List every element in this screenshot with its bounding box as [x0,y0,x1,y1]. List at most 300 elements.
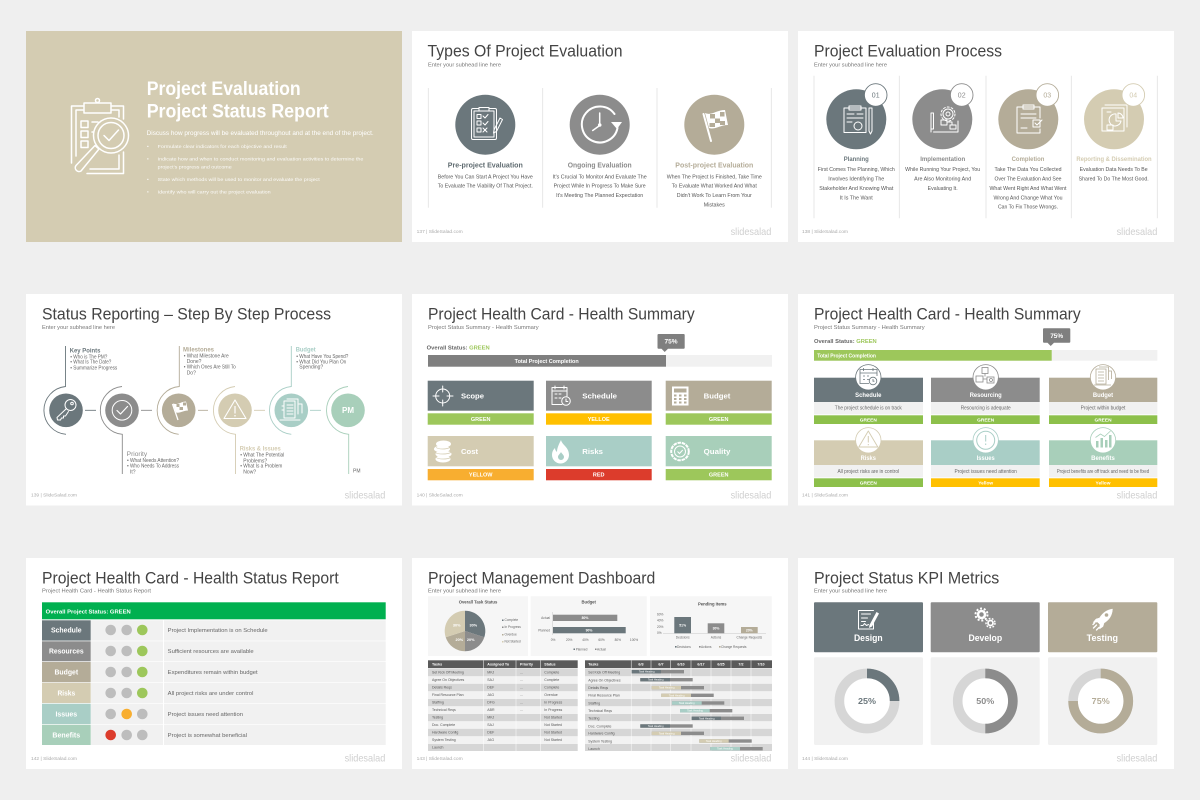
chart: budget bars: Planned [576,647,588,651]
chart: gantt timeline: 6/25 [717,662,725,666]
card: risks [546,436,652,480]
chart: gantt timeline: Staffing [588,702,600,706]
row: benefits: Benefits [52,732,80,740]
chart: gantt timeline: Doc. Complete [588,724,612,728]
card: issues: Issues [977,455,995,462]
chart: overall task status pie: In Progress [504,625,521,629]
table: task assignments: DEF [487,686,494,690]
subhead: Project Status Summary - Health Summary [814,325,925,331]
card: benefits [1049,428,1157,487]
card: scope [428,381,534,425]
chart: gantt timeline: Agree On Objectives [588,678,621,682]
table: task assignments: Doc. Complete [432,723,455,727]
chart: pending items columns: 40% [657,619,664,623]
step: reporting and dissemination: Shared To Do The Most Good. [1079,177,1149,183]
overall status banner: Overall Project Status: GREEN [46,609,131,615]
step: completion: Completion [1012,156,1044,163]
callout: 75 percent: 75% [664,338,678,346]
step: implementation: Are Also Monitoring And [914,177,971,183]
step: key points: Key Points [70,347,101,354]
logo wordmark: slidesalad [731,489,771,501]
card: budget: GREEN [709,417,729,423]
chart: overall task status pie: 20% [455,638,464,642]
row: budget [42,662,386,682]
chart: gantt timeline: 6/3 [638,662,644,666]
row: issues [42,704,386,724]
chart: pending items columns: Change Requests [737,635,762,639]
logo wordmark: slidesalad [345,753,385,765]
chart: pending items columns: 20% [746,628,753,632]
chart: budget bars: Actual [597,647,606,651]
completion progress bar [814,350,1157,361]
card: budget: GREEN [1094,417,1112,423]
subhead: Project Health Card - Health Status Report [42,589,151,595]
card: develop [931,602,1040,745]
card: schedule: The project schedule is on track [835,406,902,412]
item: post-project evaluation: Didn't Work To Learn From Your [677,193,752,199]
chart: pending items columns: Actions [711,635,722,639]
row: resources: Resources [49,648,84,656]
chart: gantt timeline: Task Heading [669,693,685,697]
step: milestones: Milestones [183,346,215,353]
subhead: Enter your subhead line here [428,62,501,68]
card: design: Design [854,633,883,644]
table: task assignments: Overdue [544,693,558,697]
panel: health summary with icon cards [412,294,788,506]
step: planning: Planning [844,156,869,163]
step: budget [274,346,348,427]
table: task assignments: Status [544,662,556,666]
intro and bullet list: • [147,178,149,183]
heading: Project Management Dashboard [428,569,655,587]
logo wordmark: slidesalad [731,753,771,765]
card: testing [1048,602,1157,745]
chart: pending items columns: 0% [657,631,662,635]
table: task assignments: ... [520,678,523,682]
chart: gantt timeline: Details Reqs [588,686,608,690]
step: key points: Who is The PM? [73,354,107,360]
table: task assignments: DEF [487,730,494,734]
row: resources [42,641,386,661]
step: key points: Summarize Progress [73,365,118,371]
item: post-project evaluation: To Evaluate What Worked And What [672,184,757,190]
card: testing: 75% [1092,696,1110,706]
step: budget: What Did You Plan On [299,359,346,365]
footer: 138 | SlideSalad.com [802,229,848,234]
card: benefits: Yellow [1096,480,1111,486]
panel: project management dashboard [412,558,788,769]
callout: 75 percent: 75% [1050,333,1063,340]
step: risks and issues: • [240,464,242,470]
chart: budget bars: 20% [566,638,573,642]
table: task assignments: JAG [487,693,494,697]
card: develop: Develop [968,633,1002,644]
card: cost: Cost [461,447,479,456]
chart: pending items columns: Actions [701,645,712,649]
footer: 141 | SlideSalad.com [802,492,848,497]
panel: project evaluation process [798,31,1174,242]
table: task assignments: Hardware Config [432,730,458,734]
item: ongoing evaluation: Project While In Progress To Make Sure [554,184,646,190]
panel: status reporting step by step [26,294,402,506]
subhead: Project Status Summary - Health Summary [428,325,539,331]
completion progress bar: Total Project Completion [515,359,579,365]
card: risks: All project risks are in control [837,469,899,475]
step: completion: Over The Evaluation And See [994,177,1062,183]
row: benefits: Project is somewhat beneficial [168,733,247,739]
step: priority [105,394,179,475]
step: priority: Priority [127,451,148,458]
chart: gantt timeline: Launch [588,747,600,751]
table: task assignments: SAJ [487,678,494,682]
chart: overall task status pie: Complete [504,618,518,622]
row: resources: Sufficient resources are available [168,649,254,655]
chart: budget bars: 90% [586,628,592,632]
row: benefits [42,725,386,745]
step: key points: • [70,354,72,360]
step: planning: It Is The Want [840,195,873,201]
chart: pending items columns: 51% [679,624,686,628]
logo wordmark: slidesalad [1117,226,1157,238]
logo wordmark: slidesalad [1117,489,1157,501]
row: risks: Risks [57,690,75,698]
chart: budget bars: Budget [581,599,597,604]
chart: budget bars: Planned [538,628,550,632]
chart: budget bars: Actual [541,616,550,620]
chart: overall task status pie: 20% [467,638,475,642]
table: task assignments: MKJ [487,716,495,720]
chart: pending items columns: Change Requests [721,645,747,649]
heading: Status Reporting – Step By Step Process [42,305,331,323]
chart: gantt timeline: Testing [588,717,599,721]
card: issues [931,428,1040,487]
chart: gantt timeline: 7/2 [738,662,744,666]
step: milestones: What Milestone Are [187,354,229,360]
card: resourcing [931,365,1040,424]
intro and bullet list: project's progress and outcome [158,164,232,170]
card: budget [1049,365,1157,424]
heading: Project Health Card - Health Status Report [42,569,339,587]
table: task assignments: Complete [544,686,559,690]
chart: gantt timeline: Task Heading [648,678,664,682]
card: risks: Risks [582,447,603,456]
chart: budget bars [531,596,647,656]
table: task assignments: Complete [544,678,559,682]
item: post-project evaluation [667,95,762,208]
step: planning: First Comes The Planning, Which [818,167,895,173]
intro and bullet list: • [147,157,149,162]
card: schedule [814,365,923,424]
step: key points: • [70,360,72,366]
item: ongoing evaluation: It's Meeting The Planned Expectation [556,193,643,199]
card: schedule: Schedule [855,392,882,399]
chart: gantt timeline: 6/10 [677,662,685,666]
intro and bullet list: • [147,191,149,196]
row: schedule: Schedule [51,628,82,635]
card: risks: GREEN [860,480,877,486]
table: task assignments: ... [520,670,523,674]
step: reporting and dissemination [1076,84,1152,183]
card: resourcing: Resourcing is adequate [961,406,1011,412]
table: task assignments: Tasks [432,662,442,666]
subhead: Enter your subhead line here [814,62,887,68]
table: task assignments: ... [520,708,523,712]
step: budget: • [296,359,298,365]
card: budget: Project within budget [1081,406,1126,412]
chart: gantt timeline: Final Resource Plan [588,694,620,698]
chart: pending items columns [650,596,772,656]
heading: Project Evaluation [147,78,301,100]
overall status: Overall Status: GREEN [427,346,490,352]
table: task assignments: Not Started [544,723,562,727]
completion progress bar: Total Project Completion [817,353,876,359]
item: pre-project evaluation: To Evaluate The Viability Of That Project. [438,184,533,190]
panel: health summary with descriptions [798,294,1174,506]
step: reporting and dissemination: Evaluation Data Needs To Be [1080,167,1148,173]
callout: 75 percent [1043,328,1070,346]
chart: budget bars: 80% [615,638,621,642]
step: planning: Stakeholder And Knowing What [819,186,894,192]
chart: pending items columns: Pending Items [698,602,727,607]
table: task assignments: ... [520,693,523,697]
step: budget: Budget [296,346,316,353]
step: implementation [905,84,980,192]
chart: gantt timeline: Set Kick Off Meeting [588,670,620,674]
row: schedule: Project Implementation is on Schedule [168,628,268,634]
card: benefits: Project benefits are off track and need to be fixed [1057,469,1149,475]
chart: gantt timeline: Task Heading [706,739,722,743]
table: task assignments: Assigned To [487,662,510,666]
item: post-project evaluation: When The Project Is Finished, Take Time [667,174,762,180]
step: implementation: Evaluating It. [928,186,958,192]
table: task assignments: Technical Reqs [432,708,456,712]
table: task assignments [428,660,578,751]
table: task assignments: ... [520,700,523,704]
step: risks and issues: Now? [243,469,256,475]
chart: gantt timeline: Task Heading [679,701,695,705]
item: ongoing evaluation: Ongoing Evaluation [568,163,632,170]
chart: gantt timeline: Tasks [588,662,598,666]
step: key points: What Is The Date? [73,360,111,366]
chart: gantt timeline: Task Heading [639,670,655,674]
heading: Project Evaluation Process [814,43,1002,61]
step: completion: Wrong And Change What You [994,195,1063,201]
table: task assignments: Not Started [544,730,562,734]
chart: budget bars: 80% [582,616,588,620]
step: risks and issues: Problems? [243,458,267,464]
card: risks [814,428,923,487]
step: risks and issues: What Is a Problem [243,464,282,470]
step: milestones: Which Ones Are Still To [187,365,236,371]
chart: overall task status pie [428,596,528,656]
card: issues: Project issues need attention [955,469,1017,475]
card: issues: Yellow [978,480,993,486]
chart: pending items columns: Decisions [677,645,691,649]
subhead: Enter your subhead line here [42,325,115,331]
step: risks and issues [218,394,284,475]
step: milestones: Done? [187,359,202,365]
table: task assignments: ABR [487,708,495,712]
footer: 139 | SlideSalad.com [31,492,77,497]
card: scope: GREEN [471,417,491,423]
chart: overall task status pie: Overdue [504,633,517,637]
footer: 142 | SlideSalad.com [31,756,77,761]
number badge 02: 02 [958,92,966,100]
chart: gantt timeline: 7/10 [757,662,765,666]
step: budget: • [296,354,298,360]
table: task assignments: In Progress [544,700,562,704]
table: task assignments: Priority [520,662,534,666]
heading: Project Health Card - Health Summary [814,305,1081,323]
step: completion: Take The Data You Collected [994,167,1062,173]
card: budget [666,381,772,425]
table: task assignments: Set Kick Off Meeting [432,670,464,674]
item: ongoing evaluation [553,95,647,199]
step: milestones: Do? [187,370,196,376]
table: task assignments: Launch [432,746,444,750]
step: completion: What Went Right And What Went [990,186,1067,192]
table: task assignments: Testing [432,716,443,720]
panel: project evaluation cover slide: Project Status Report [147,100,329,122]
table: task assignments: Complete [544,670,559,674]
table: task assignments: Not Started [544,738,562,742]
chart: pending items columns: Decisions [676,635,690,639]
completion progress bar [428,355,772,367]
heading: Types Of Project Evaluation [428,43,622,61]
intro and bullet list [147,130,374,196]
chart: overall task status pie: 30% [453,624,461,628]
card: resourcing: GREEN [977,417,995,423]
heading: Project Health Card - Health Summary [428,305,695,323]
item: pre-project evaluation: Before You Can Start A Project You Have [438,174,533,180]
row: budget: Expenditures remain within budget [168,670,258,676]
item: post-project evaluation: Post-project Evaluation [675,163,753,170]
chart: gantt timeline [585,660,772,751]
process connectors and arcs [44,346,349,474]
step: priority: Who Needs To Address [130,464,179,470]
chart: gantt timeline: 6/17 [697,662,705,666]
chart: gantt timeline: Task Heading [699,716,715,720]
card: risks: RED [593,472,605,478]
card: quality: GREEN [709,472,729,478]
item: pre-project evaluation: Pre-project Evaluation [448,163,523,170]
panel: health status report table [26,558,402,769]
subhead: Enter your subhead line here [814,589,887,595]
chart: pending items columns: 30% [713,626,719,630]
step: planning [818,84,895,201]
row: schedule [42,620,386,641]
intro and bullet list: Indicate how and when to conduct monitoring and evaluation activities to determine the [158,156,364,162]
number badge 03: 03 [1043,92,1051,100]
card: design: 25% [858,696,876,706]
card: benefits: Benefits [1091,455,1115,462]
table: task assignments: System Testing [432,738,456,742]
intro and bullet list: Identify who will carry out the project evaluation [158,190,271,196]
table: task assignments: In Progress [544,708,562,712]
chart: budget bars: 100% [630,638,638,642]
table: task assignments: Details Reqs [432,686,452,690]
chart: gantt timeline: Task Heading [717,747,733,751]
table: task assignments: SAJ [487,723,494,727]
subhead: Enter your subhead line here [428,589,501,595]
card: quality [666,436,772,480]
step: priority: • [127,464,129,470]
step: completion: Can To Fix Those Wrongs. [998,205,1058,211]
card: risks: Risks [861,455,876,462]
card: cost: YELLOW [469,472,493,478]
chart: gantt timeline: Technical Reqs [588,709,612,713]
step: priority: It? [130,469,136,475]
card: budget: Budget [704,391,731,400]
step: risks and issues: Risks & Issues [240,446,281,453]
chart: gantt timeline: Hardware Config [588,732,615,736]
chart: budget bars: 60% [598,638,605,642]
panel: types of project evaluation [412,31,788,242]
step: risks and issues: • [240,453,242,459]
card: schedule: YELLOE [588,417,610,423]
chart: gantt timeline: Task Heading [687,709,703,713]
step: PM: PM [342,406,354,415]
icon: clipboard with magnifier [72,98,128,174]
chart: gantt timeline: Task Heading [648,724,664,728]
chart: gantt timeline: Task Heading [659,686,675,690]
intro and bullet list: Formulate clear indicators for each objective and result [158,144,287,150]
chart: overall task status pie: Overall Task Status [459,599,498,604]
table: task assignments: MKJ [487,670,495,674]
step: budget: What Have You Spend? [299,354,348,360]
card: quality: Quality [704,447,731,456]
step: risks and issues: What The Potential [243,453,284,459]
card: resourcing: Resourcing [970,392,1002,399]
overall status banner [42,602,386,619]
panel: project status KPI metrics [798,558,1174,769]
step: PM: PM [353,469,360,475]
table: task assignments: Final Resource Plan [432,693,464,697]
card: schedule [546,381,652,425]
callout: 75 percent [658,334,685,352]
row: issues: Issues [55,712,77,718]
step: completion [990,84,1067,211]
row: risks [42,683,386,703]
card: schedule: Schedule [582,391,617,400]
chart: pending items columns: 60% [657,612,664,616]
step: planning: Involves Identifying The [828,177,884,183]
row: risks: All project risks are under control [168,691,253,697]
step: priority: • [127,458,129,464]
step: milestones: • [184,365,186,371]
step: milestones: • [184,354,186,360]
number badge 01: 01 [872,92,880,100]
card: design [814,602,923,745]
chart: budget bars: 0% [551,638,555,642]
item: ongoing evaluation: It's Crucial To Monitor And Evaluate The [553,174,647,180]
intro and bullet list: Discuss how progress will be evaluated throughout and at the end of the project. [147,130,374,137]
step: priority: What Needs Attention? [130,458,179,464]
step: key points: • [70,365,72,371]
table: task assignments: Staffing [432,700,444,704]
table: task assignments: Not Started [544,716,562,720]
footer: 137 | SlideSalad.com [417,229,463,234]
chart: gantt timeline: Task Heading [659,731,675,735]
step: implementation: Implementation [920,156,965,163]
step: key points [49,347,118,427]
row: issues: Project issues need attention [168,712,243,718]
chart: overall task status pie: 30% [469,624,478,628]
intro and bullet list: • [147,145,149,150]
step: PM [331,394,365,475]
chart: budget bars: 40% [582,638,589,642]
chart: gantt timeline: 6/7 [658,662,664,666]
